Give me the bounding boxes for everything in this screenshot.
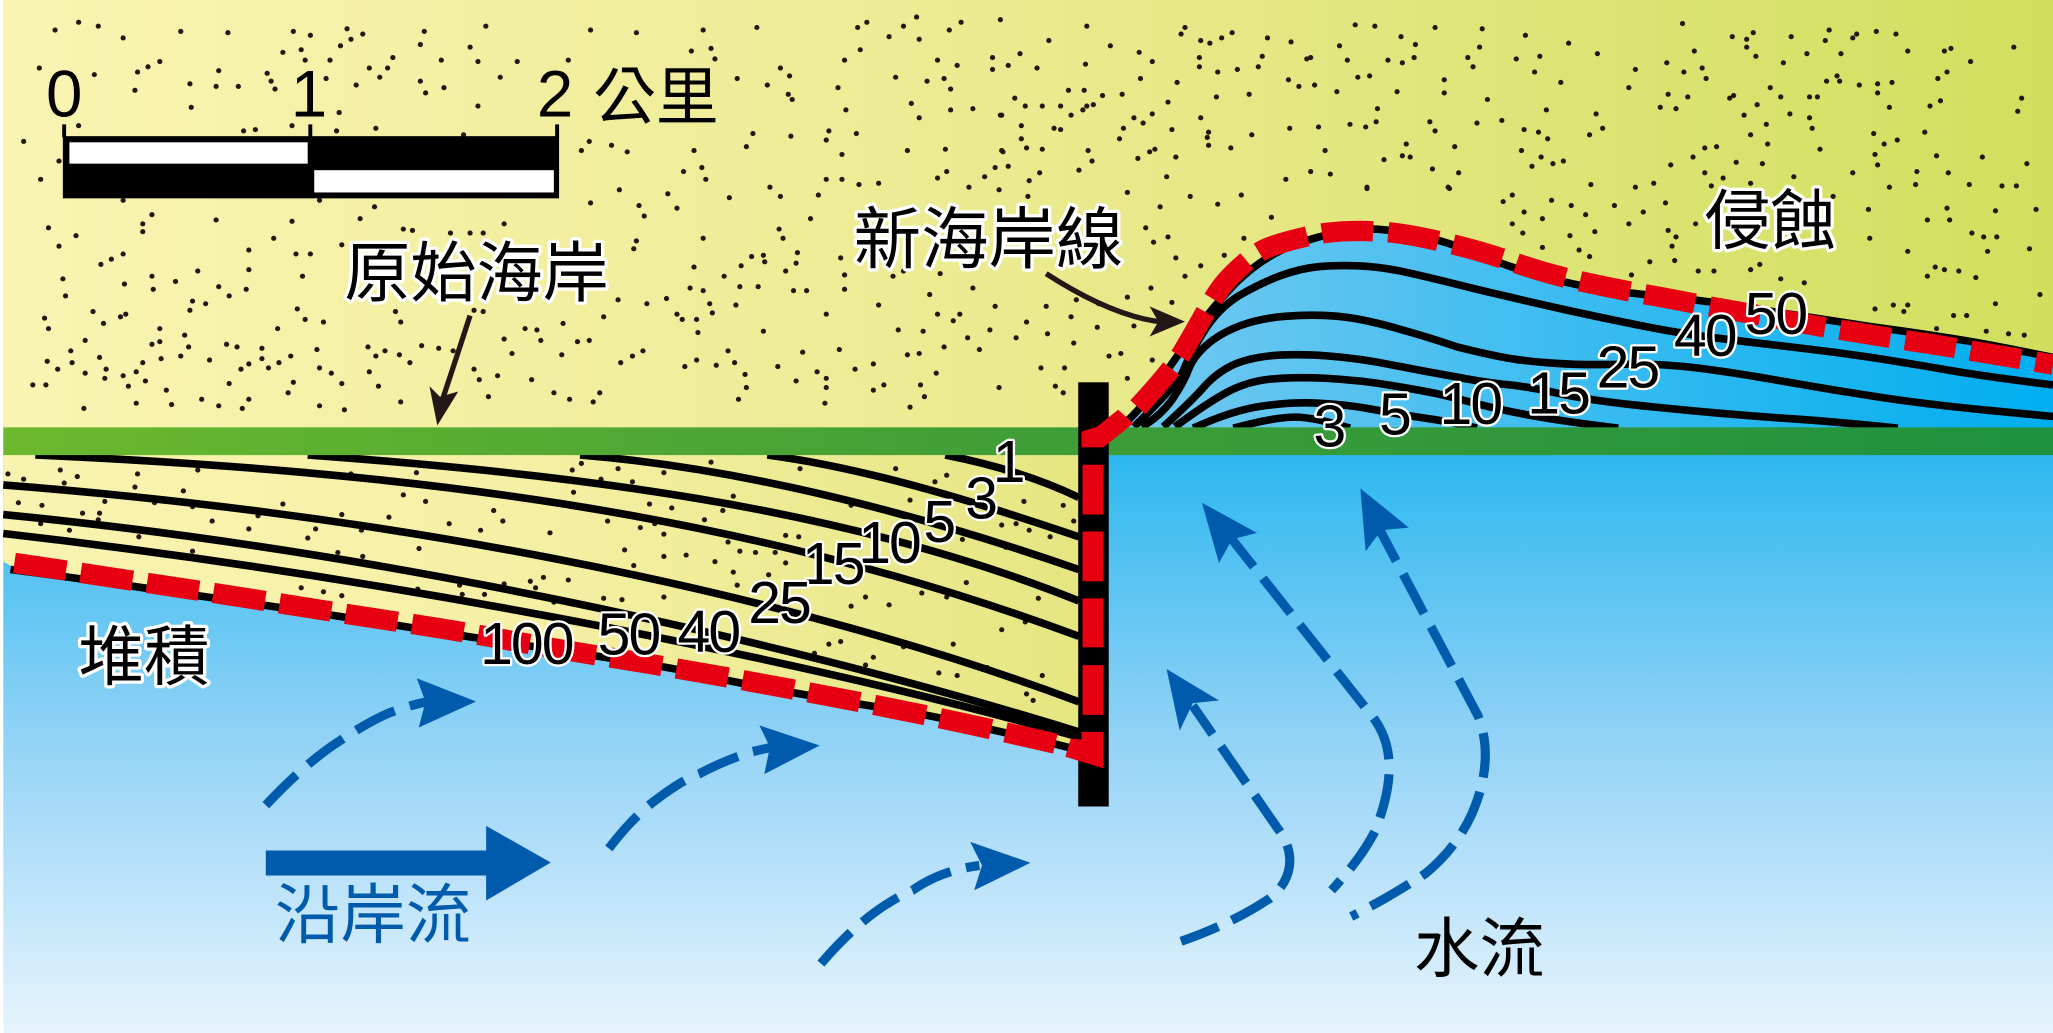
arrow: longshore current: [266, 826, 551, 901]
label: original coast: 原始海岸: [344, 237, 609, 311]
label: longshore current: 沿岸流: [275, 878, 471, 951]
original coastline green strip: [3, 427, 2053, 455]
scale labels: [46, 58, 573, 131]
new shoreline red dashes, eroded side: [1081, 231, 2053, 447]
contour year labels, eroded side: 40: [1674, 304, 1736, 369]
panel: sea water: [3, 452, 2053, 1033]
contour year labels, eroded side: 50: [1745, 282, 1806, 347]
panel: sandy land above the original coast: [3, 0, 2053, 432]
contour year labels, eroded side: 25: [1597, 336, 1658, 401]
arrows: dashed water flow: [266, 488, 1485, 964]
scale labels: 0: [46, 58, 82, 131]
contour year labels, eroded side: 15: [1527, 362, 1589, 427]
label: accretion: 堆積: [79, 621, 209, 694]
label: new shoreline: 新海岸線: [854, 203, 1123, 278]
label: original coast: [344, 237, 609, 426]
arrow: to original coast: [429, 316, 470, 426]
contour year labels, accreted side: 1: [993, 430, 1024, 495]
contour year labels, eroded side: 5: [1379, 383, 1410, 448]
contour year labels, accreted side: 3: [965, 466, 996, 531]
scale labels: 2: [537, 58, 573, 131]
contour year labels, eroded side: 3: [1314, 394, 1345, 459]
scale bar: [46, 58, 719, 198]
contour year labels, eroded side: 10: [1440, 372, 1501, 437]
new shoreline red dashes, accreted side: [14, 563, 1103, 768]
groyne: [1078, 382, 1109, 806]
arrow: to new shoreline: [1046, 274, 1185, 336]
contour year labels, accreted side: 5: [923, 490, 954, 555]
accreted coastline contours: [3, 455, 1079, 750]
label: water flow: 水流: [1414, 912, 1545, 985]
panel: eroded bay right of the groyne: [1106, 229, 2053, 437]
label: new shoreline: [854, 203, 1185, 336]
scale unit: 公里: [593, 63, 719, 133]
contour year labels, accreted side: 50: [598, 603, 659, 668]
label: erosion: 侵蝕: [1705, 185, 1836, 258]
eroded coastline contours: [1106, 229, 2053, 437]
sand dots on upper land: [24, 17, 2040, 410]
contour year labels, accreted side: 15: [802, 532, 864, 597]
contour year labels, eroded side: [1314, 282, 1806, 459]
scale labels: 1: [291, 58, 327, 131]
sand dots on accreted land: [8, 462, 1074, 700]
contour year labels, accreted side: 40: [678, 600, 739, 665]
contour year labels, accreted side: 10: [858, 511, 920, 576]
contour year labels, accreted side: 100: [480, 612, 573, 677]
contour year labels, accreted side: 25: [748, 571, 810, 636]
contour year labels, accreted side: [480, 430, 1024, 677]
panel: accreted sand left of the groyne: [3, 452, 1081, 752]
